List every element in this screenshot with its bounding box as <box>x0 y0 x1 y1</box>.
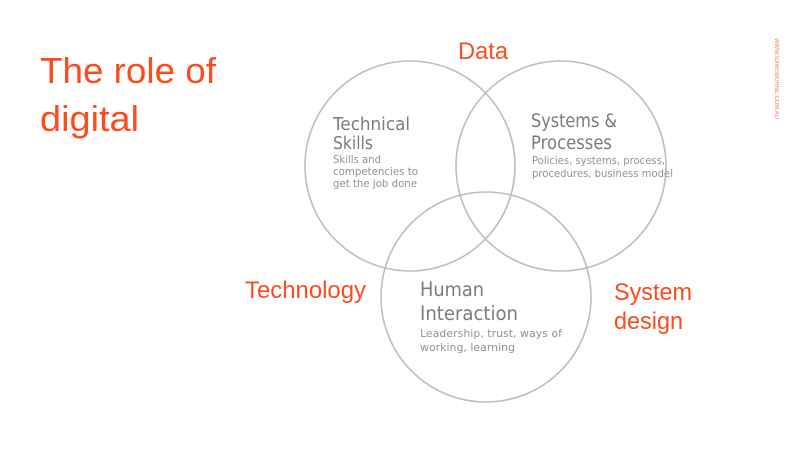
text block: Human Interaction: working, learning <box>420 341 515 354</box>
text block: Human Interaction: Human <box>420 278 484 301</box>
label: Technology: Technology <box>245 277 366 304</box>
vertical website text: WWW.IDIWSBORNE.COM.AU <box>773 38 779 119</box>
title: digital <box>40 98 139 139</box>
text block: Technical Skills: Skills <box>333 134 373 154</box>
text block: Technical Skills: competencies to <box>333 165 418 178</box>
text block: Technical Skills: Technical <box>332 115 410 135</box>
title: The role of <box>40 50 217 91</box>
text block: Systems and Processes: procedures, business model <box>532 167 673 180</box>
text block: Technical Skills <box>332 115 418 190</box>
text block: Systems and Processes: Systems & <box>531 111 617 132</box>
text block: Systems and Processes: Processes <box>531 133 612 154</box>
text block: Human Interaction <box>420 278 563 354</box>
label: System design: design <box>614 308 683 335</box>
text block: Systems and Processes <box>531 111 673 180</box>
text block: Technical Skills: get the job done <box>333 177 417 190</box>
label: Data: Data <box>458 38 509 65</box>
label: System design <box>614 279 692 335</box>
venn diagram circles <box>305 61 666 402</box>
text block: Technical Skills: Skills and <box>333 153 381 166</box>
title <box>40 50 217 139</box>
label: System design: System <box>614 279 692 306</box>
text block: Human Interaction: Interaction <box>420 302 518 325</box>
text block: Systems and Processes: Policies, systems, process, <box>532 154 665 167</box>
text block: Human Interaction: Leadership, trust, ways of <box>420 327 563 340</box>
